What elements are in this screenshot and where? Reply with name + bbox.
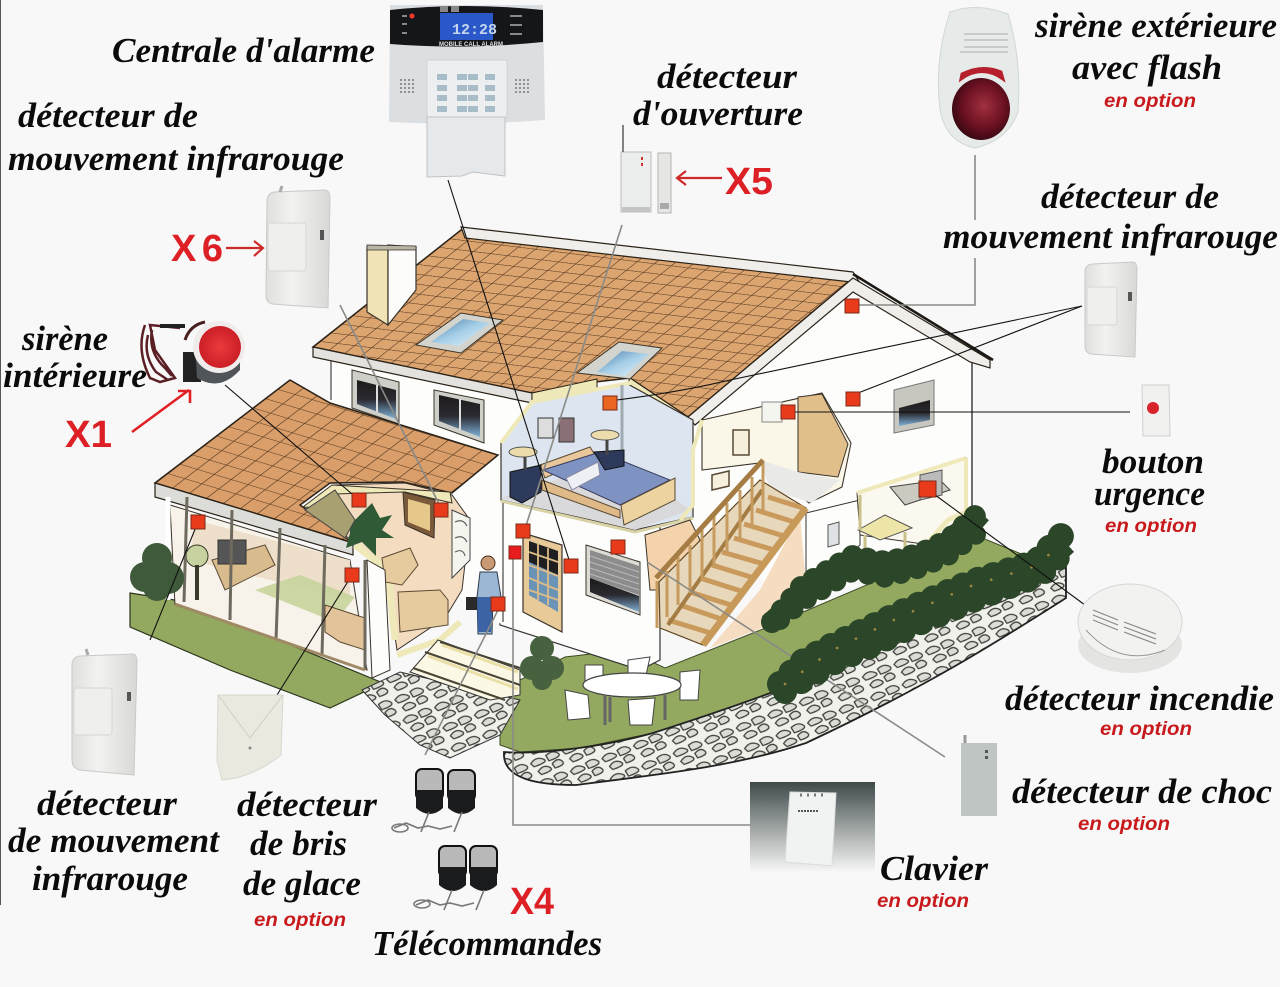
under-stair room [645,515,806,648]
garden furniture [565,657,700,725]
remote pair top [392,769,475,832]
label: motion detector bottom left: détecteur [37,784,177,823]
label: opening detector: détecteur [657,57,797,96]
label: motion detector top left [8,96,344,178]
label: keypad: Clavier [880,849,988,888]
label: shock detector: détecteur de choc [1012,772,1272,811]
label: outdoor siren: en option [1104,91,1196,112]
label: outdoor siren [1034,6,1277,112]
alarm control panel: 12:28 [452,22,497,39]
veranda interior [168,497,367,670]
smoke detector [1078,584,1182,673]
label: keypad [877,849,988,912]
roller shutter window [586,545,640,615]
PIR detector right [1085,262,1137,357]
label: opening detector [633,57,803,133]
panic button [1142,385,1170,436]
label: fire detector: détecteur incendie [1005,679,1274,718]
chimney [367,245,416,325]
label: glass break detector: de glace [243,864,361,903]
entrance door [523,533,562,632]
person [466,556,501,634]
bedroom cutaway [501,383,693,532]
label: panic button: urgence [1094,474,1205,513]
PIR detector X6 [266,186,330,308]
quantity X5 with arrow: X5 [725,161,773,203]
garden lawn right [500,535,1036,752]
label: centrale d'alarme: Centrale d'alarme [112,31,375,70]
living room interior [303,483,470,655]
kitchen corner [828,458,966,565]
label: opening detector: d'ouverture [633,94,803,133]
outdoor siren with flash [938,7,1019,148]
main roof [313,227,993,426]
label: indoor siren: intérieure [3,356,147,395]
label: motion detector top left: mouvement infrarouge [8,139,344,178]
label: glass break detector: en option [254,910,346,931]
label: outdoor siren: avec flash [1072,48,1222,87]
staircase [656,460,806,645]
hedge lower [775,535,1066,692]
label: shock detector [1012,772,1272,835]
door shrub [520,636,564,690]
label: glass break detector: détecteur [237,785,377,824]
label: panic button [1094,442,1205,537]
label: keypad: en option [877,891,969,912]
left shrub [130,543,184,601]
label: glass break detector [237,785,377,931]
shock detector [961,735,997,816]
label: fire detector [1005,679,1274,740]
label: motion detector top left: détecteur de [18,96,198,135]
garden lawn left [130,593,383,708]
landing room and door [680,393,851,520]
grey connecting lines [340,155,975,825]
label: remotes: Télécommandes [372,924,602,963]
label: indoor siren [3,319,147,395]
black connecting lines [150,180,1130,695]
label: indoor siren: sirène [21,319,108,358]
hedge upper [768,516,983,623]
label: panic button: bouton [1102,442,1204,481]
glass break detector [217,695,283,780]
alarm control panel: MOBILE CALL ALARM [439,42,503,48]
indoor siren with wires [141,321,245,383]
lower roof [155,380,498,555]
label: fire detector: en option [1100,719,1192,740]
label: glass break detector: de bris [250,824,347,863]
label: outdoor siren: sirène extérieure [1034,6,1277,45]
label: motion detector bottom left [8,784,220,898]
quantity X1 with arrow: X1 [65,414,112,456]
quantity X4: X4 [510,881,554,923]
upper windows [352,370,484,443]
PIR detector bottom left [72,649,137,775]
label: motion detector right: mouvement infrarouge [943,217,1278,256]
label: shock detector: en option [1078,814,1170,835]
alarm control panel [389,5,545,177]
front path stones [362,672,520,758]
front steps [410,640,520,700]
quantity X6 with arrow: X6 [171,228,223,270]
label: motion detector right [943,177,1278,256]
remote pair bottom [414,846,497,910]
quantity X6 with arrow [171,228,263,270]
house illustration [130,227,1066,785]
quantity X1 with arrow [65,390,190,456]
skylights [416,313,662,379]
quantity X5 with arrow [677,161,773,203]
label: panic button: en option [1105,516,1197,537]
remote controls [392,769,497,910]
wall keypad [750,782,875,872]
label: motion detector right: détecteur de [1041,177,1219,216]
veranda corner pillar [367,560,390,678]
lower-level white walls [331,285,972,670]
right window [894,380,934,433]
label: motion detector bottom left: de mouvement [8,821,220,860]
label: motion detector bottom left: infrarouge [32,859,188,898]
door opening sensor [621,125,671,213]
red position markers [191,299,936,611]
stone border [504,545,1066,785]
